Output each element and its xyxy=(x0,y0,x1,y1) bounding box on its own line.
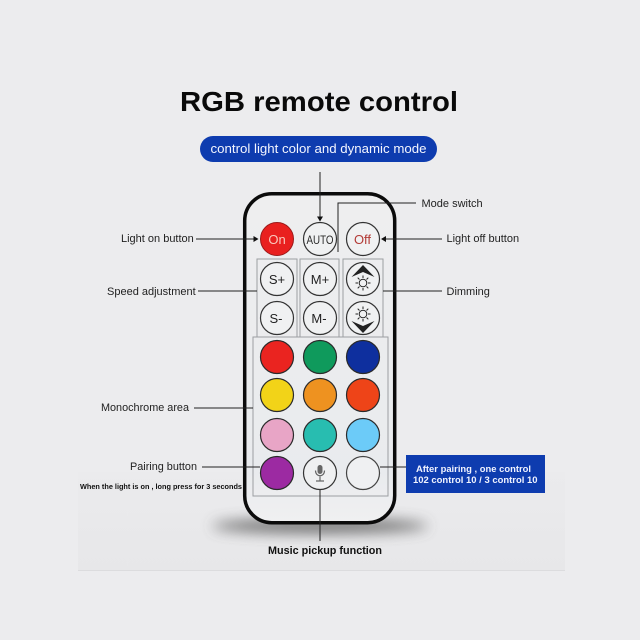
title: RGB remote control xyxy=(180,86,458,117)
subtitle pill: control light color and dynamic mode xyxy=(210,142,427,156)
callout: after pairing: 102 control 10 / 3 control 10 xyxy=(413,475,538,486)
label: pairing button: Pairing button xyxy=(130,461,197,473)
button: brightness up xyxy=(346,262,380,296)
button: brightness down xyxy=(346,302,380,334)
button: AUTO: AUTO xyxy=(306,235,334,247)
monochrome colour buttons xyxy=(260,340,380,490)
label: light off button: Light off button xyxy=(446,233,519,245)
note: pairing instructions: When the light is on , long press for 3 seconds xyxy=(80,484,242,491)
leader lines xyxy=(194,172,442,541)
button: M-: M- xyxy=(311,311,327,326)
callout: after pairing: After pairing , one control xyxy=(416,464,531,475)
remote shadow xyxy=(212,519,428,533)
label: light on button: Light on button xyxy=(121,233,194,245)
button: S- xyxy=(260,302,294,334)
button: S+: S+ xyxy=(269,272,285,287)
button: S-: S- xyxy=(270,311,282,326)
button: M+: M+ xyxy=(311,272,329,287)
button: M+ xyxy=(304,262,336,296)
button: S+ xyxy=(260,262,294,296)
button: AUTO xyxy=(304,222,336,256)
button: On: On xyxy=(268,232,286,247)
button: On xyxy=(260,222,294,256)
label: mode switch: Mode switch xyxy=(422,198,483,210)
button: blank pairing xyxy=(346,456,380,490)
button group outlines xyxy=(253,259,388,496)
remote control body xyxy=(245,194,395,523)
button: music microphone xyxy=(304,456,336,490)
subtitle pill xyxy=(200,136,437,162)
button: M- xyxy=(304,302,336,334)
label: monochrome area: Monochrome area xyxy=(101,402,190,414)
label: speed adjustment: Speed adjustment xyxy=(107,286,196,298)
button: Off: Off xyxy=(354,232,371,247)
callout: after pairing xyxy=(406,455,545,493)
button: Off xyxy=(346,222,380,256)
label: music pickup function: Music pickup function xyxy=(268,545,382,557)
arrowheads xyxy=(254,216,386,242)
label: dimming: Dimming xyxy=(446,286,490,298)
